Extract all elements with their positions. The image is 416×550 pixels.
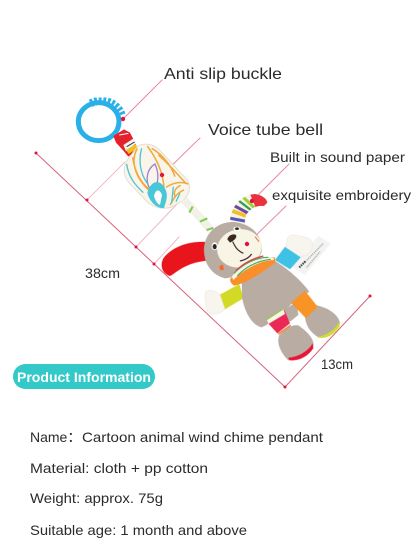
label: exquisite embroidery: exquisite embroidery: [272, 187, 411, 203]
label: anti slip buckle: Anti slip buckle: [164, 66, 282, 83]
dog head: [204, 222, 262, 278]
heading badge: product information: [13, 364, 155, 389]
dog red ear: [162, 242, 206, 276]
text: product details: Name：: [30, 429, 81, 445]
icon: ribbon: [181, 197, 214, 232]
dog scarf: [230, 256, 275, 286]
dimension lines: [36, 80, 370, 387]
dog leg bands: [266, 291, 318, 334]
dog striped ear: [230, 194, 268, 224]
dog legs and feet: [278, 302, 340, 360]
label: 38cm: 38cm: [85, 266, 120, 281]
text: product details: Suitable age: 1 month and above: [30, 522, 247, 538]
text: product details: Cartoon animal wind chime pendant: [82, 429, 323, 445]
dog face: [212, 227, 259, 271]
label: built in sound paper: Built in sound paper: [270, 149, 405, 165]
label: 13cm: 13cm: [321, 357, 353, 372]
marker dots: [34, 117, 372, 389]
text: product details: Weight: approx. 75g: [30, 490, 163, 506]
icon: plush dog: [162, 190, 340, 360]
text: product details: Material: cloth + pp cotton: [30, 460, 208, 476]
icon: voice tube bell: [124, 144, 189, 208]
text: product details: [30, 429, 323, 538]
icon: ring and fabric knot: [78, 101, 138, 157]
label: voice tube bell: Voice tube bell: [208, 122, 323, 139]
heading badge: product information: Product Information: [17, 369, 151, 385]
dog arms: [205, 235, 312, 314]
dog body: [242, 261, 309, 327]
care label: [290, 236, 331, 275]
